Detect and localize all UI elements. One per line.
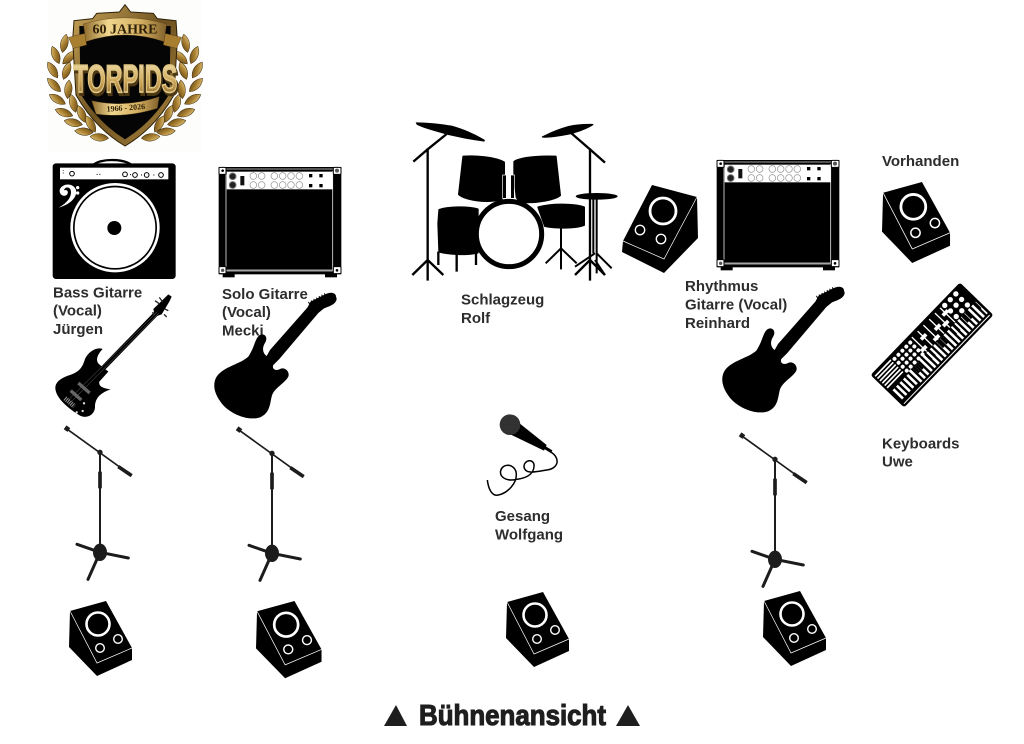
control panel [60, 168, 168, 179]
tom mounts [503, 175, 514, 198]
wordmark face: TORPIDS [73, 57, 177, 101]
wordmark shadow: TORPIDS [75, 59, 179, 103]
heading text: Bühnenansicht [419, 700, 606, 732]
bass headstock [153, 294, 172, 317]
label: vorhanden: Vorhanden [882, 153, 959, 170]
amp cabinet [53, 163, 176, 279]
label: drums: Rolf [461, 310, 491, 327]
mic head [500, 414, 520, 435]
logo background [48, 0, 202, 152]
years text: 1966 - 2026 [106, 102, 145, 114]
keyboard chassis [871, 283, 993, 407]
sliders [909, 305, 957, 354]
right cymbal and stand [542, 124, 605, 281]
monitor 1 [69, 601, 132, 676]
mic stand 2 [236, 426, 304, 580]
handheld microphone [487, 414, 557, 495]
left floor tom [438, 207, 478, 272]
label: solo guitar: Mecki [222, 322, 264, 340]
rhythm guitar [722, 287, 845, 412]
bass drum [476, 201, 542, 267]
icon: bass clef [59, 184, 79, 208]
label: bass guitar: Bass Gitarre [53, 284, 142, 302]
label: rhythm guitar: Gitarre (Vocal) [685, 296, 787, 314]
shield [73, 5, 177, 146]
bass strings and pickups [65, 312, 159, 412]
stage view heading [384, 700, 640, 732]
solo guitar amp [219, 167, 341, 277]
drum kit [412, 122, 618, 281]
button grid right [945, 288, 973, 317]
wordmark [73, 57, 179, 103]
monitor 2 [256, 601, 322, 678]
right rack tom [514, 156, 560, 202]
button grid left [895, 342, 923, 371]
label: vocals: Wolfgang [495, 526, 563, 544]
label: rhythm guitar: Reinhard [685, 315, 750, 332]
label: rhythm guitar: Rhythmus [685, 278, 758, 295]
label: solo guitar: (Vocal) [222, 304, 271, 321]
monitor: vorhanden [882, 182, 950, 263]
label: vocals: Gesang [495, 508, 550, 525]
mic connector [543, 447, 552, 452]
right tom [538, 205, 584, 269]
left rack tom [459, 156, 504, 201]
keyboard [871, 283, 993, 407]
left cymbal and stand [412, 122, 485, 281]
label: bass guitar: (Vocal) [53, 302, 102, 320]
label: drums: Schlagzeug [461, 292, 544, 308]
bass neck [90, 313, 157, 382]
monitor 4 [763, 591, 826, 666]
monitor beside drums [622, 185, 698, 273]
shield inner black [79, 26, 171, 139]
bass body [55, 348, 111, 417]
ribbon text: 60 JAHRE [92, 22, 157, 37]
mic stand 1 [64, 425, 132, 579]
speaker [70, 183, 160, 272]
top ribbon [68, 18, 182, 48]
bass amp [53, 160, 176, 279]
hi-hat [575, 193, 618, 275]
triangle left [384, 705, 407, 726]
label: solo guitar: Solo Gitarre [222, 286, 308, 303]
amp handle [93, 160, 132, 165]
vent stripes [882, 368, 897, 381]
label: keyboards: Uwe [882, 454, 913, 470]
triangle right [616, 705, 640, 726]
monitor 3 [506, 592, 569, 667]
logo: Torpids 60 Jahre badge [45, 0, 205, 152]
mic stand 4 [739, 432, 807, 586]
label: keyboards: Keyboards [882, 436, 960, 452]
rhythm guitar amp [717, 160, 839, 270]
solo guitar [214, 293, 337, 418]
lower ribbon [92, 97, 159, 115]
mic body [507, 420, 547, 451]
bass tuners [152, 297, 168, 317]
label: bass guitar: Jürgen [53, 321, 103, 338]
keys [893, 305, 990, 404]
laurel wreath [45, 33, 205, 142]
mic cable [487, 452, 557, 495]
bass guitar [55, 294, 172, 417]
